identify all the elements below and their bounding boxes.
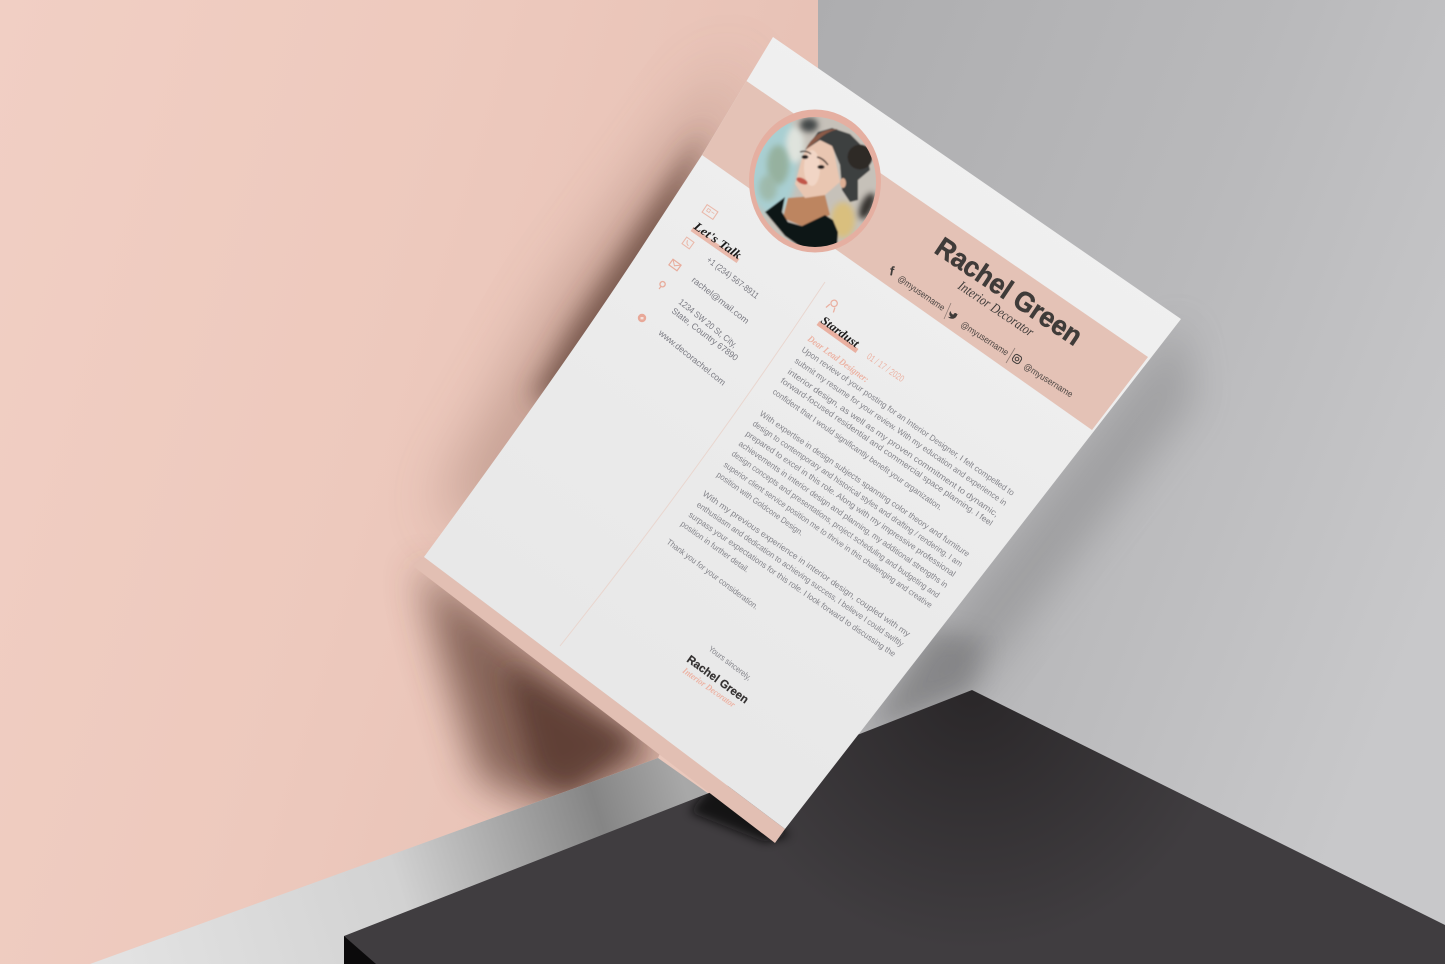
paragraph one: Upon review of your posting for an Interior Designer, I felt compelled to xyxy=(800,344,1017,498)
paragraph three: position in further detail. xyxy=(679,518,751,574)
panel: white floor strip xyxy=(90,758,760,964)
name heading: Rachel Green xyxy=(930,231,1088,352)
panel: pink wall background xyxy=(398,53,754,820)
instagram handle: @myusername xyxy=(1022,361,1075,399)
divider two xyxy=(1006,348,1015,363)
paper edge strip xyxy=(413,557,785,843)
divider one xyxy=(944,303,951,319)
contact heading underline xyxy=(692,229,738,261)
website: www.decorachel.com xyxy=(656,327,728,387)
icon: globe xyxy=(638,314,646,322)
panel: resume paper xyxy=(424,37,1181,829)
address: 1234 SW 20 St, City, xyxy=(677,297,739,350)
closing line: Thank you for your consideration. xyxy=(665,537,761,612)
paragraph two: With expertise in design subjects spanning color theory and furniture xyxy=(758,408,972,559)
paragraph one: forward-focused residential and commercial space planning. I feel xyxy=(779,375,995,528)
paragraph two: design to contemporary and historical styles and drafting / rendering. I am xyxy=(751,418,965,569)
paragraph two: position with Goldcone Design. xyxy=(715,469,806,538)
signature title: Interior Decorator xyxy=(680,665,738,710)
icon: twitter xyxy=(947,310,959,321)
paragraph one: submit my resume for your review. With my education and experience in xyxy=(793,355,1009,508)
paragraph two: superior client service position me to thrive in this challenging and creative xyxy=(722,459,935,610)
contact heading: Let's Talk xyxy=(690,218,744,262)
icon: id card xyxy=(702,205,718,219)
phone number: +1 (234) 567-8911 xyxy=(705,255,761,301)
paragraph one: confident that I would significantly benefit your organization. xyxy=(771,386,945,512)
panel: dark box xyxy=(344,690,1445,964)
twitter handle: @myusername xyxy=(959,319,1010,358)
date: 01 / 17 / 2020 xyxy=(864,351,906,385)
icon: instagram xyxy=(1011,353,1023,365)
panel: gray wall background xyxy=(818,0,1445,964)
icon: award xyxy=(826,298,840,312)
company underline xyxy=(818,323,857,351)
paragraph three: With my previous experience in interior design, coupled with my xyxy=(701,488,913,639)
icon: mail xyxy=(669,259,681,271)
sidebar divider xyxy=(560,282,825,646)
signature name: Rachel Green xyxy=(684,654,750,706)
icon: facebook: f xyxy=(888,263,896,279)
sign-off: Yours sincerely, xyxy=(707,644,754,682)
paragraph three: enthusiasm and dedication to achieving success, I believe I could swiftly xyxy=(695,499,906,649)
paragraph one: interior design, as well as my proven commitment to dynamic, xyxy=(786,366,1001,519)
facebook handle: @myusername xyxy=(896,273,947,313)
contact column xyxy=(638,205,761,387)
paragraph three: surpass your expectations for this role. I look forward to discussing the xyxy=(687,509,898,659)
address line two: State, Country 67890 xyxy=(670,306,740,363)
profile photo xyxy=(746,105,881,252)
salutation: Dear Lead Designer: xyxy=(805,334,870,385)
letter body xyxy=(665,298,1017,710)
social row xyxy=(888,263,1075,399)
paragraph two: achievements in interior design and planning, my additional strengths in xyxy=(737,438,950,590)
email: rachel@mail.com xyxy=(690,275,751,326)
company heading: Stardust xyxy=(818,313,863,351)
paragraph two: design concepts and presentations, project scheduling and budgeting and xyxy=(730,448,942,600)
job title: Interior Decorator xyxy=(954,278,1037,341)
icon: pin xyxy=(657,281,666,291)
paragraph two: prepared to excel in this role. Along with my impressive professional xyxy=(744,428,958,579)
icon: phone xyxy=(682,237,694,249)
header pink band xyxy=(702,81,1148,430)
